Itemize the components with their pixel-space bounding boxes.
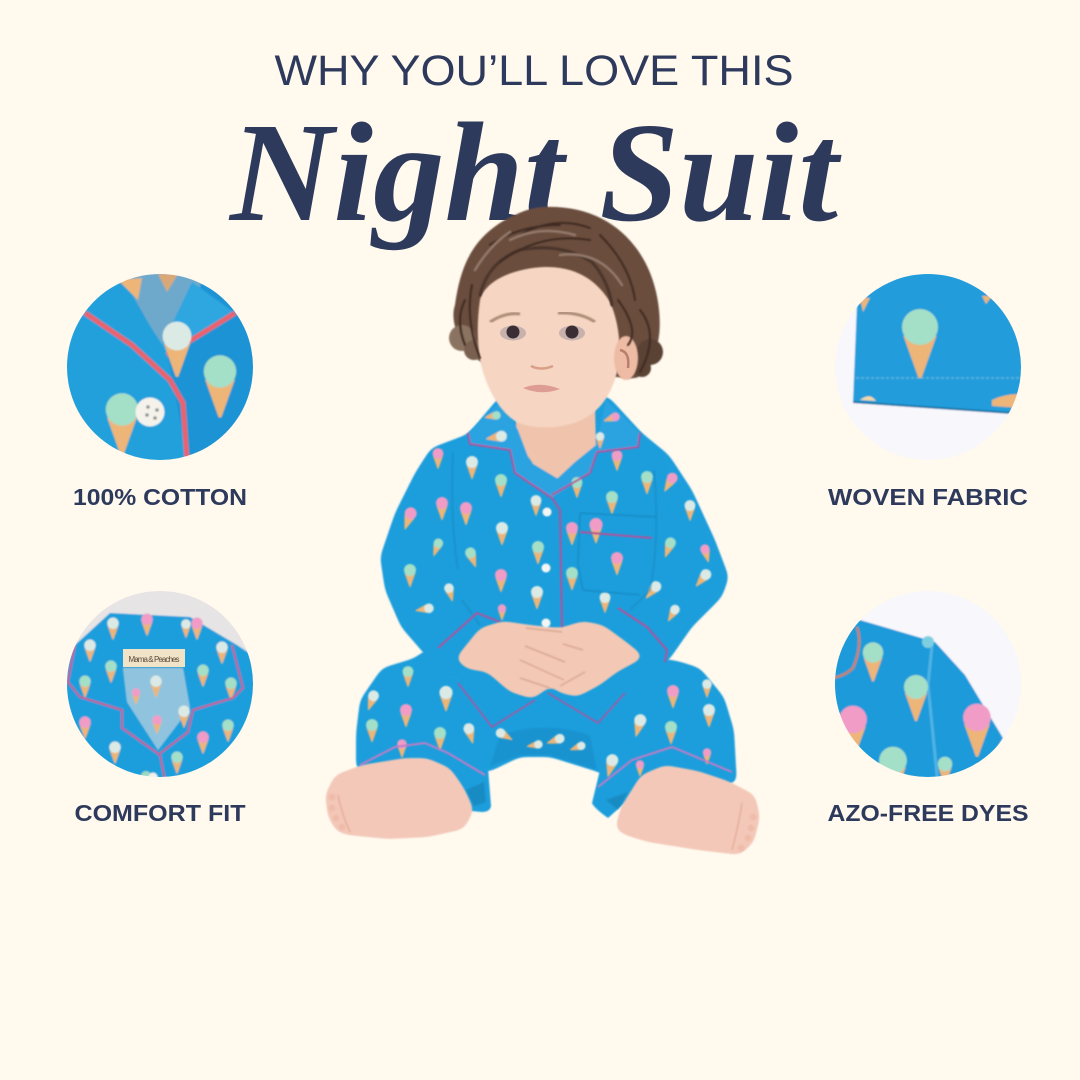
- title: night suit: Night Suit: [228, 93, 842, 251]
- label: woven fabric: WOVEN FABRIC: [828, 484, 1028, 510]
- image: collar and button close-up: [67, 274, 253, 460]
- woven brand tag: Mama & Peaches: [128, 655, 180, 664]
- neck and collar: [468, 400, 640, 628]
- panel: woven fabric: [828, 270, 1030, 510]
- print on shirt: [399, 448, 714, 624]
- illustration: seated baby in ice-cream pyjamas: [325, 207, 760, 855]
- panel: 100% cotton: [67, 274, 253, 505]
- image: shoulder and print close-up: [835, 591, 1021, 777]
- panel: azo-free dyes: [826, 585, 1030, 826]
- shirt seams and cuffs: [438, 452, 667, 727]
- woven brand tag: [123, 649, 185, 667]
- image: sleeve hem close-up: [835, 274, 1021, 460]
- label: azo-free dyes: AZO-FREE DYES: [828, 800, 1028, 826]
- hands: [455, 621, 645, 699]
- hair back: [449, 207, 663, 378]
- image: collar and brand label close-up: [67, 591, 253, 777]
- pyjama trousers: [356, 640, 737, 818]
- face: [478, 267, 638, 427]
- panel: comfort fit: [67, 591, 253, 821]
- heading: why you'll love this: WHY YOU’LL LOVE THIS: [274, 47, 794, 95]
- label: comfort fit: COMFORT FIT: [74, 800, 246, 826]
- feet: [325, 758, 760, 855]
- pyjama shirt: [380, 396, 729, 730]
- label: 100% cotton: 100% COTTON: [73, 484, 247, 510]
- curls: [460, 223, 650, 372]
